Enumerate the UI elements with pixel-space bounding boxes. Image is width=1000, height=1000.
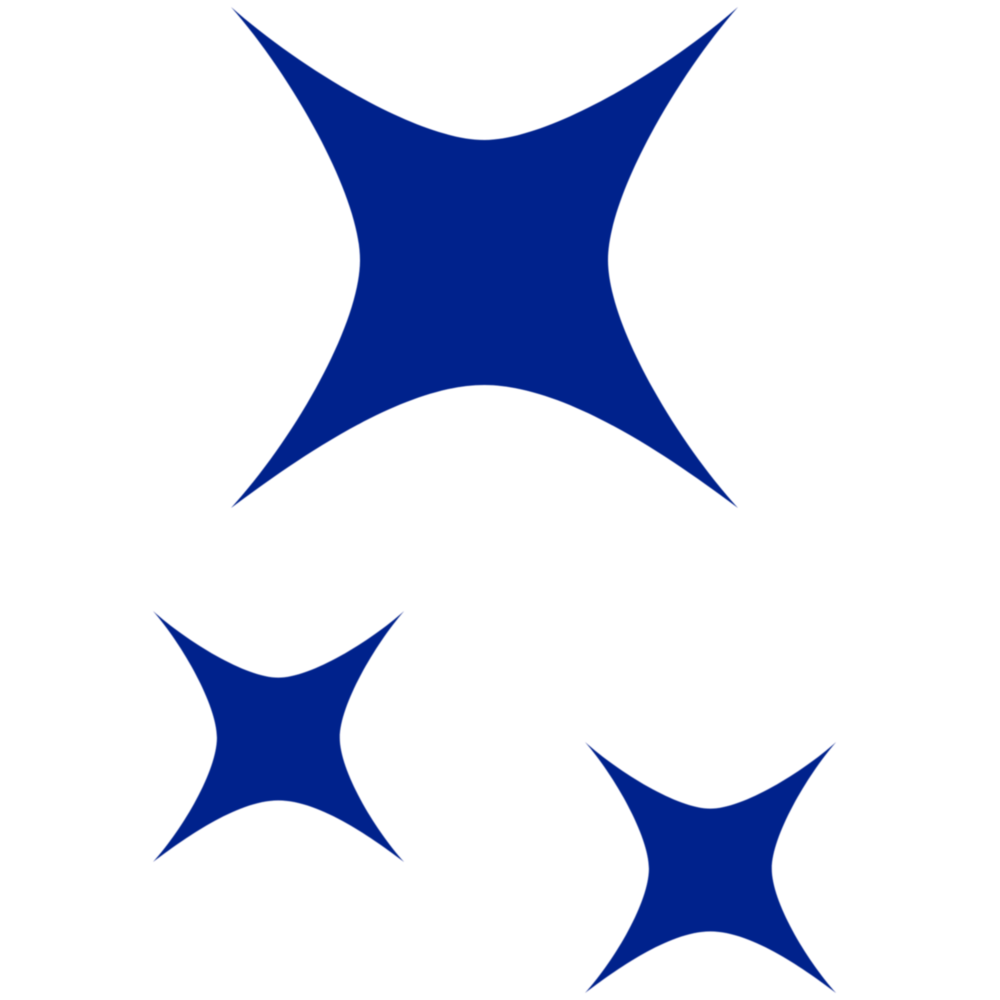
icon: lower right sparkle [585, 742, 836, 993]
icon: lower left sparkle [153, 611, 404, 862]
icon: large sparkle [231, 7, 738, 508]
